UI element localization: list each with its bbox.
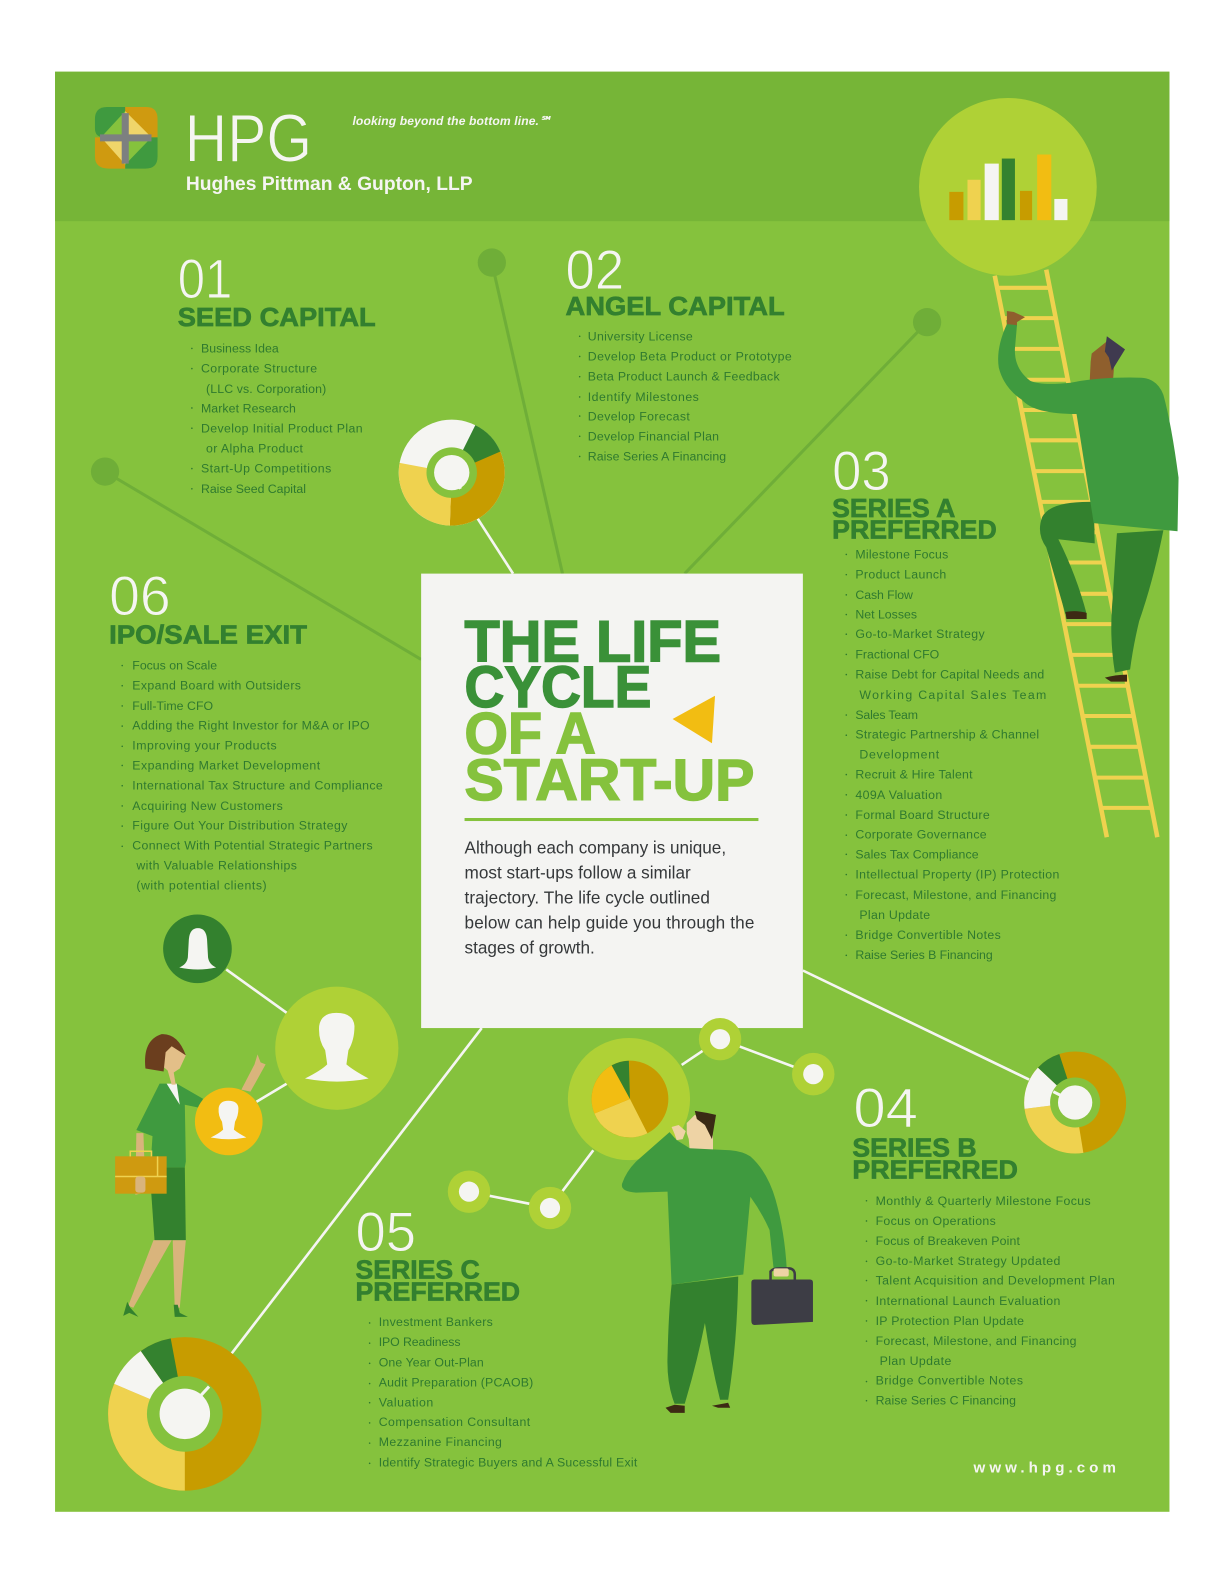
section 01: seed capital: or Alpha Product: [206, 441, 304, 455]
website url: www.hpg.com: [973, 1459, 1116, 1476]
section 04: series B preferred: Focus of Breakeven Point: [876, 1234, 1021, 1248]
logo wordmark HPG: HPG: [185, 102, 312, 177]
section 01: seed capital: Corporate Structure: [201, 362, 317, 376]
section 03: series A preferred: Plan Update: [859, 908, 930, 922]
section 02: angel capital: 02: [566, 239, 624, 301]
donut chart: top: [425, 446, 478, 499]
section 05: series C preferred: IPO Readiness: [379, 1335, 461, 1349]
section 05: series C preferred: Mezzanine Financing: [379, 1435, 502, 1449]
intro paragraph: Although each company is unique,: [465, 837, 726, 857]
section 06: IPO/sale exit: Connect With Potential Strategic Partners: [132, 838, 373, 852]
section 04: series B preferred: Raise Series C Financing: [876, 1394, 1016, 1408]
section 03: series A preferred: Bridge Convertible Notes: [855, 928, 1001, 942]
icon: profile, yellow circle: [195, 1088, 263, 1155]
section 04: series B preferred: [852, 1077, 1115, 1408]
section 03: series A preferred: Corporate Governance: [855, 828, 987, 842]
section 04: series B preferred: Monthly & Quarterly Milestone Focus: [876, 1194, 1091, 1208]
section 05: series C preferred: Audit Preparation (PCAOB): [379, 1376, 533, 1390]
section 04: series B preferred: PREFERRED: [852, 1155, 1018, 1185]
figure: man climbing ladder: [998, 311, 1179, 682]
section 06: IPO/sale exit: Focus on Scale: [132, 659, 217, 673]
section 04: series B preferred: International Launch Evaluation: [876, 1294, 1061, 1308]
section 03: series A preferred: 409A Valuation: [855, 788, 942, 802]
section 03: series A preferred: Product Launch: [855, 568, 946, 582]
section 03: series A preferred: Go-to-Market Strategy: [855, 627, 985, 641]
section 02: angel capital: ANGEL CAPITAL: [566, 291, 785, 321]
section 03: series A preferred: Forecast, Milestone, and Financing: [855, 888, 1056, 902]
network lines between profile icons: [226, 969, 287, 1102]
intro paragraph: trajectory. The life cycle outlined: [465, 887, 710, 907]
title: OF A: [465, 701, 596, 766]
icon: female profile, dark circle: [163, 914, 232, 983]
network node 1: [699, 1018, 741, 1060]
section 06: IPO/sale exit: (with potential clients): [136, 879, 267, 893]
section 03: series A preferred: Working Capital Sales Team: [859, 688, 1046, 702]
section 04: series B preferred: Go-to-Market Strategy Updated: [876, 1254, 1061, 1268]
donut chart: bottom left: [146, 1375, 223, 1452]
section 06: IPO/sale exit: Expand Board with Outsiders: [132, 679, 301, 693]
figure: businesswoman: [115, 1034, 266, 1317]
section 03: series A preferred: Recruit & Hire Talent: [855, 768, 973, 782]
section 03: series A preferred: Sales Tax Compliance: [855, 847, 979, 861]
section 03: series A preferred: [832, 440, 1060, 962]
section 04: series B preferred: Focus on Operations: [876, 1214, 996, 1228]
section 03: series A preferred: Milestone Focus: [855, 547, 948, 561]
section 03: series A preferred: Cash Flow: [855, 588, 913, 602]
section 05: series C preferred: [355, 1201, 638, 1469]
intro paragraph: most start-ups follow a similar: [465, 863, 691, 883]
network node 2: [792, 1053, 834, 1095]
donut chart: right: [1050, 1077, 1101, 1128]
section 01: seed capital: Develop Initial Product Plan: [201, 422, 363, 436]
section 06: IPO/sale exit: Figure Out Your Distribution Strategy: [132, 819, 348, 833]
section 03: series A preferred: Fractional CFO: [855, 647, 939, 661]
connector: white line to right donut: [803, 970, 1029, 1080]
section 01: seed capital: [178, 248, 376, 496]
section 01: seed capital: Business Idea: [201, 341, 279, 355]
section 06: IPO/sale exit: International Tax Structure and Compliance: [132, 779, 383, 793]
section 03: series A preferred: Net Losses: [855, 608, 917, 622]
section 03: series A preferred: Strategic Partnership & Channel: [855, 728, 1039, 742]
section 02: angel capital: [566, 239, 792, 464]
section 06: IPO/sale exit: 06: [109, 565, 171, 627]
intro paragraph: stages of growth.: [465, 937, 595, 957]
section 06: IPO/sale exit: Adding the Right Investor for M&A or IPO: [132, 719, 370, 733]
section 05: series C preferred: 05: [355, 1201, 416, 1263]
title: [465, 609, 754, 813]
section 01: seed capital: 01: [178, 248, 232, 310]
network lines between nodes: [469, 1039, 813, 1208]
title: START-UP: [465, 748, 754, 813]
bar chart circle: [919, 98, 1097, 276]
section 02: angel capital: Raise Series A Financing: [588, 450, 726, 464]
connector: white line to bottom-left donut: [230, 1028, 482, 1355]
section 03: series A preferred: Intellectual Property (IP) Protection: [855, 868, 1060, 882]
panel: header band: [55, 72, 1169, 221]
icon: yellow arrow triangle: [673, 696, 715, 743]
company name: Hughes Pittman & Gupton, LLP: [186, 174, 473, 195]
section 06: IPO/sale exit: Improving your Products: [132, 738, 277, 752]
section 03: series A preferred: SERIES A: [832, 493, 955, 523]
section 02: angel capital: University License: [588, 329, 693, 343]
network node 4: [529, 1187, 571, 1229]
section 05: series C preferred: Investment Bankers: [379, 1315, 493, 1329]
central panel: [421, 574, 803, 1028]
section 01: seed capital: Start-Up Competitions: [201, 462, 331, 476]
section 02: angel capital: Develop Financial Plan: [588, 429, 719, 443]
section 06: IPO/sale exit: Expanding Market Development: [132, 759, 321, 773]
figure: man with briefcase: [622, 1111, 813, 1413]
section 04: series B preferred: 04: [853, 1077, 918, 1139]
section 05: series C preferred: PREFERRED: [355, 1277, 520, 1307]
section 05: series C preferred: Valuation: [379, 1395, 433, 1409]
section 01: seed capital: SEED CAPITAL: [178, 302, 376, 332]
tagline: looking beyond the bottom line.℠: [352, 114, 551, 128]
section 05: series C preferred: One Year Out-Plan: [379, 1355, 484, 1369]
section 03: series A preferred: 03: [832, 440, 891, 502]
section 02: angel capital: Develop Forecast: [588, 410, 690, 424]
pie chart circle: [568, 1038, 690, 1160]
section 02: angel capital: Identify Milestones: [588, 390, 699, 404]
ladder: [995, 270, 1157, 837]
intro paragraph: [465, 837, 754, 957]
section 06: IPO/sale exit: [109, 565, 383, 893]
icon: male profile, large circle: [275, 987, 398, 1110]
network node 3: [448, 1170, 490, 1213]
title: CYCLE: [465, 655, 651, 720]
section 01: seed capital: Raise Seed Capital: [201, 482, 306, 496]
section 03: series A preferred: Formal Board Structure: [855, 808, 990, 822]
section 05: series C preferred: Identify Strategic Buyers and A Sucessful Exit: [379, 1455, 638, 1469]
section 06: IPO/sale exit: Acquiring New Customers: [132, 799, 283, 813]
section 06: IPO/sale exit: IPO/SALE EXIT: [109, 619, 307, 649]
connector: node to stage 03: [685, 308, 941, 574]
section 01: seed capital: (LLC vs. Corporation): [206, 382, 326, 396]
section 04: series B preferred: SERIES B: [852, 1132, 977, 1162]
section 03: series A preferred: Raise Debt for Capital Needs and: [855, 668, 1044, 682]
section 04: series B preferred: IP Protection Plan Update: [876, 1314, 1024, 1328]
section 03: series A preferred: Raise Series B Financing: [855, 948, 993, 962]
section 03: series A preferred: PREFERRED: [832, 514, 997, 544]
logo mark: [95, 107, 158, 169]
section 04: series B preferred: Plan Update: [880, 1354, 951, 1368]
section 06: IPO/sale exit: Full-Time CFO: [132, 699, 213, 713]
connector: white line to top donut: [477, 517, 513, 574]
title: THE LIFE: [465, 609, 721, 674]
section 01: seed capital: Market Research: [201, 402, 296, 416]
section 04: series B preferred: Forecast, Milestone, and Financing: [876, 1334, 1077, 1348]
section 02: angel capital: Beta Product Launch & Feedback: [588, 370, 780, 384]
section 04: series B preferred: Bridge Convertible Notes: [876, 1374, 1023, 1388]
section 03: series A preferred: Development: [859, 747, 940, 761]
connector: node to stage 02: [478, 248, 563, 574]
section 04: series B preferred: Talent Acquisition and Development Plan: [876, 1274, 1115, 1288]
section 02: angel capital: Develop Beta Product or Prototype: [588, 350, 792, 364]
section 05: series C preferred: SERIES C: [355, 1255, 480, 1285]
connector: node to stage 06: [91, 457, 421, 659]
intro paragraph: below can help guide you through the: [465, 913, 754, 933]
section 05: series C preferred: Compensation Consultant: [379, 1415, 531, 1429]
section 06: IPO/sale exit: with Valuable Relationships: [135, 859, 297, 873]
section 03: series A preferred: Sales Team: [855, 708, 918, 722]
